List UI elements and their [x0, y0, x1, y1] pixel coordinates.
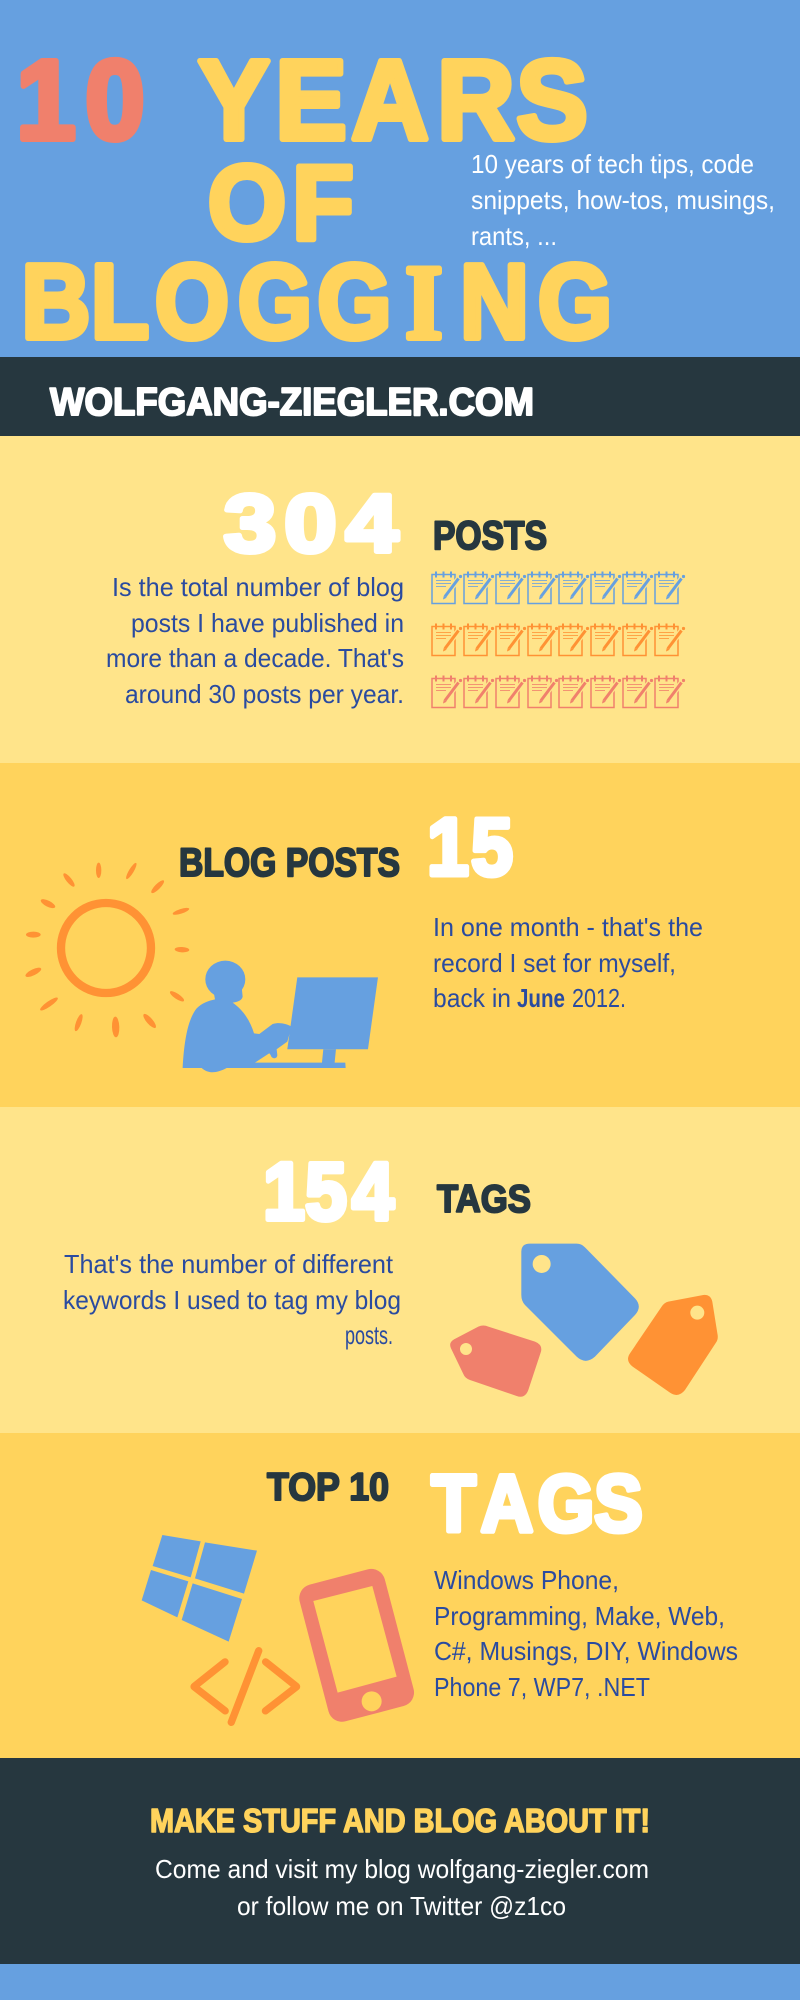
subtitle: 10 years of tech tips, code: [471, 149, 754, 179]
footer text: [155, 1854, 649, 1921]
tag list: Windows Phone,: [434, 1565, 619, 1595]
subtitle: snippets, how-tos, musings,: [471, 185, 775, 215]
panel: tags count: [0, 1107, 800, 1433]
footer heading: MAKE STUFF AND BLOG ABOUT IT!: [150, 1802, 650, 1839]
record description: In one month - that's the: [433, 912, 703, 942]
icon: code brackets: [189, 1646, 302, 1727]
tag list: C#, Musings, DIY, Windows: [434, 1636, 738, 1666]
tags description: posts.: [345, 1320, 393, 1350]
panel: blog post record: [0, 763, 800, 1107]
subtitle: rants, ...: [471, 221, 557, 251]
record description: 2012.: [572, 983, 626, 1013]
panel: header: [0, 0, 800, 361]
footer text: Come and visit my blog wolfgang-ziegler.com: [155, 1854, 649, 1884]
tags description: That's the number of different: [64, 1249, 394, 1279]
footer text: or follow me on Twitter @z1co: [237, 1891, 566, 1921]
title: [16, 37, 612, 361]
posts description: posts I have published in: [131, 608, 404, 638]
icon: orange tag: [628, 1295, 718, 1395]
tags description: [63, 1249, 401, 1350]
record description: [433, 912, 703, 1013]
record description: June: [517, 983, 565, 1013]
panel: site banner: [0, 357, 800, 436]
title: OF: [208, 143, 354, 262]
title: 10: [16, 37, 145, 164]
record description: record I set for myself,: [433, 948, 676, 978]
panel: bottom strip: [0, 1964, 800, 2000]
title: BLOGGING: [22, 243, 612, 361]
number: 15: 15: [427, 801, 513, 893]
subtitle: [471, 149, 775, 251]
posts description: more than a decade. That's: [106, 643, 404, 673]
posts description: around 30 posts per year.: [125, 679, 404, 709]
tag list: [434, 1565, 738, 1702]
icons: blue notebooks: [432, 572, 685, 604]
tags description: keywords I used to tag my blog: [63, 1285, 401, 1315]
icon: windows logo: [142, 1535, 257, 1642]
heading: blog posts: BLOG POSTS: [179, 841, 400, 885]
tag list: Programming, Make, Web,: [434, 1601, 725, 1631]
icon: blue tag: [521, 1244, 639, 1361]
icon: smartphone: [296, 1566, 417, 1725]
icon: red tag: [450, 1325, 541, 1397]
number: 154: 154: [263, 1146, 394, 1237]
icon: person at computer: [183, 961, 378, 1072]
heading: posts: POSTS: [433, 514, 547, 558]
icon: sun: [24, 862, 190, 1037]
heading: top 10: TOP 10: [267, 1466, 389, 1509]
record description: back in: [433, 983, 511, 1013]
panel: posts: [0, 436, 800, 763]
icons: orange notebooks: [432, 624, 685, 656]
heading: tags: TAGS: [431, 1458, 643, 1549]
heading: tags: TAGS: [437, 1178, 531, 1221]
panel: footer: [0, 1758, 800, 1964]
number: 304: 304: [224, 477, 398, 569]
panel: top tags: [0, 1433, 800, 1758]
posts description: Is the total number of blog: [112, 572, 404, 602]
posts description: [106, 572, 404, 709]
site name: WOLFGANG-ZIEGLER.COM: [50, 381, 534, 424]
icons: red notebooks: [432, 676, 685, 708]
title: YEARS: [198, 37, 588, 164]
tag list: Phone 7, WP7, .NET: [434, 1672, 650, 1702]
